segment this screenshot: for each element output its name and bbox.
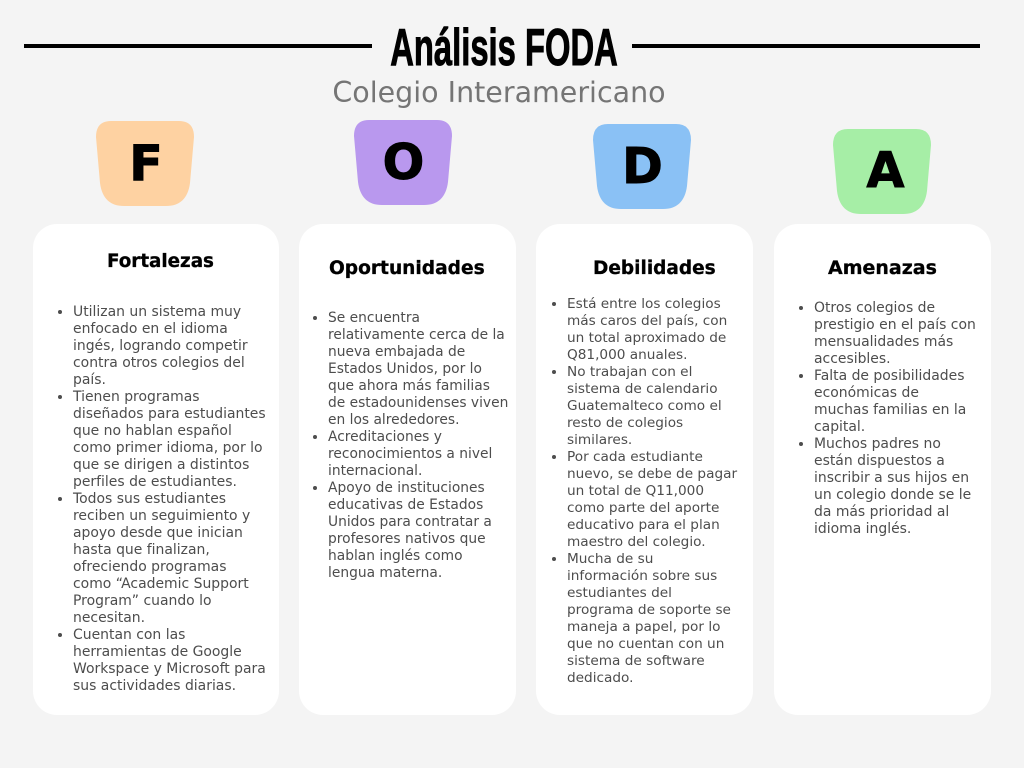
list: Fortalezas: país.: [73, 372, 106, 388]
list: Debilidades: Guatemalteco como el: [567, 398, 722, 414]
list: Debilidades: No trabajan con el: [567, 364, 692, 380]
heading: Amenazas: Amenazas: [828, 257, 937, 279]
list: Oportunidades: lengua materna.: [328, 565, 442, 581]
list: Oportunidades: Acreditaciones y: [328, 429, 442, 445]
list: Debilidades: un total aproximado de: [567, 330, 726, 346]
panel: Amenazas: [774, 224, 991, 715]
list: Fortalezas: Program” cuando lo: [73, 593, 212, 609]
list: Fortalezas: que se dirigen a distintos: [73, 457, 249, 473]
list: Amenazas: Otros colegios de: [814, 300, 935, 316]
list: Debilidades: programa de soporte se: [567, 602, 731, 618]
list: Fortalezas: apoyo desde que inician: [73, 525, 243, 541]
list: Oportunidades: [313, 310, 508, 581]
list: Debilidades: sistema de software: [567, 653, 705, 669]
badge: F: [96, 121, 194, 206]
badge: A: [833, 129, 931, 214]
heading: Debilidades: Debilidades: [593, 258, 716, 279]
heading: Oportunidades: Oportunidades: [329, 258, 485, 279]
list: Fortalezas: Cuentan con las: [73, 627, 185, 643]
list: Debilidades: Por cada estudiante: [567, 449, 703, 465]
list: Oportunidades: en los alrededores.: [328, 412, 460, 428]
list: Fortalezas: enfocado en el idioma: [73, 321, 228, 337]
list: Amenazas: prestigio en el país con: [814, 317, 976, 333]
list: Debilidades: información sobre sus: [567, 568, 717, 584]
list: Fortalezas: Workspace y Microsoft para: [73, 661, 266, 677]
badge: O: [354, 120, 452, 205]
badge: D: D: [622, 138, 663, 195]
list: Fortalezas: contra otros colegios del: [73, 355, 245, 371]
list: Oportunidades: Unidos para contratar a: [328, 514, 492, 530]
list: Debilidades: como parte del aporte: [567, 500, 719, 516]
list: Oportunidades: de estadounidenses viven: [328, 395, 508, 411]
list: Amenazas: un colegio donde se le: [814, 487, 971, 503]
badge: F: F: [129, 135, 163, 192]
list: Oportunidades: Se encuentra: [328, 310, 420, 326]
list: Fortalezas: reciben un seguimiento y: [73, 508, 250, 524]
list: Debilidades: maneja a papel, por lo: [567, 619, 720, 635]
list: Amenazas: idioma inglés.: [814, 521, 911, 537]
list: Oportunidades: relativamente cerca de la: [328, 327, 505, 343]
title rule left: [24, 44, 372, 48]
list: Oportunidades: internacional.: [328, 463, 422, 479]
list: Fortalezas: ingés, logrando competir: [73, 338, 248, 354]
list: Debilidades: Mucha de su: [567, 551, 653, 567]
list: Amenazas: están dispuestos a: [814, 453, 945, 469]
list: Oportunidades: hablan inglés como: [328, 548, 463, 564]
list: Debilidades: que no cuentan con un: [567, 636, 724, 652]
list: Debilidades: [552, 296, 738, 686]
list: Debilidades: más caros del país, con: [567, 313, 727, 329]
list: Amenazas: capital.: [814, 419, 865, 435]
list: Amenazas: Falta de posibilidades: [814, 368, 964, 384]
list: Fortalezas: como primer idioma, por lo: [73, 440, 263, 456]
list: Oportunidades: Apoyo de instituciones: [328, 480, 485, 496]
panel: Oportunidades: [299, 224, 516, 715]
list: Fortalezas: sus actividades diarias.: [73, 678, 236, 694]
list: Oportunidades: reconocimientos a nivel: [328, 446, 492, 462]
list: Fortalezas: diseñados para estudiantes: [73, 406, 266, 422]
list: Amenazas: [799, 300, 976, 537]
list: Debilidades: maestro del colegio.: [567, 534, 706, 550]
list: Amenazas: inscribir a sus hijos en: [814, 470, 969, 486]
list: Fortalezas: Todos sus estudiantes: [73, 491, 226, 507]
badge: O: O: [383, 134, 424, 191]
title rule right: [632, 44, 980, 48]
list: Fortalezas: Utilizan un sistema muy: [73, 304, 241, 320]
list: Debilidades: sistema de calendario: [567, 381, 718, 397]
panel: Fortalezas: [33, 224, 279, 715]
list: Oportunidades: nueva embajada de: [328, 344, 465, 360]
list: Fortalezas: ofreciendo programas: [73, 559, 226, 575]
list: Amenazas: Muchos padres no: [814, 436, 941, 452]
list: Fortalezas: necesitan.: [73, 610, 145, 626]
list: Fortalezas: como “Academic Support: [73, 576, 249, 592]
list: Oportunidades: Estados Unidos, por lo: [328, 361, 482, 377]
list: Debilidades: nuevo, se debe de pagar: [567, 466, 737, 482]
list: Amenazas: económicas de: [814, 385, 919, 401]
list: Debilidades: Está entre los colegios: [567, 296, 721, 312]
list: Amenazas: muchas familias en la: [814, 402, 966, 418]
subtitle: Colegio Interamericano: [332, 76, 666, 109]
list: Fortalezas: hasta que finalizan,: [73, 542, 210, 558]
list: Debilidades: similares.: [567, 432, 632, 448]
list: Debilidades: educativo para el plan: [567, 517, 720, 533]
list: Fortalezas: Tienen programas: [73, 389, 200, 405]
heading: Fortalezas: Fortalezas: [107, 251, 214, 272]
list: Fortalezas: perfiles de estudiantes.: [73, 474, 237, 490]
badge: A: A: [867, 142, 905, 199]
list: Amenazas: accesibles.: [814, 351, 891, 367]
title: Análisis FODA: [390, 19, 618, 77]
list: Fortalezas: [58, 304, 266, 694]
panel: Debilidades: [536, 224, 753, 715]
list: Debilidades: un total de Q11,000: [567, 483, 704, 499]
list: Oportunidades: que ahora más familias: [328, 378, 490, 394]
list: Debilidades: resto de colegios: [567, 415, 683, 431]
list: Debilidades: dedicado.: [567, 670, 633, 686]
badge: D: [593, 124, 691, 209]
list: Amenazas: mensualidades más: [814, 334, 953, 350]
list: Debilidades: Q81,000 anuales.: [567, 347, 687, 363]
list: Amenazas: da más prioridad al: [814, 504, 949, 520]
list: Oportunidades: profesores nativos que: [328, 531, 486, 547]
list: Fortalezas: herramientas de Google: [73, 644, 242, 660]
list: Fortalezas: que no hablan español: [73, 423, 232, 439]
list: Debilidades: estudiantes del: [567, 585, 672, 601]
list: Oportunidades: educativas de Estados: [328, 497, 483, 513]
